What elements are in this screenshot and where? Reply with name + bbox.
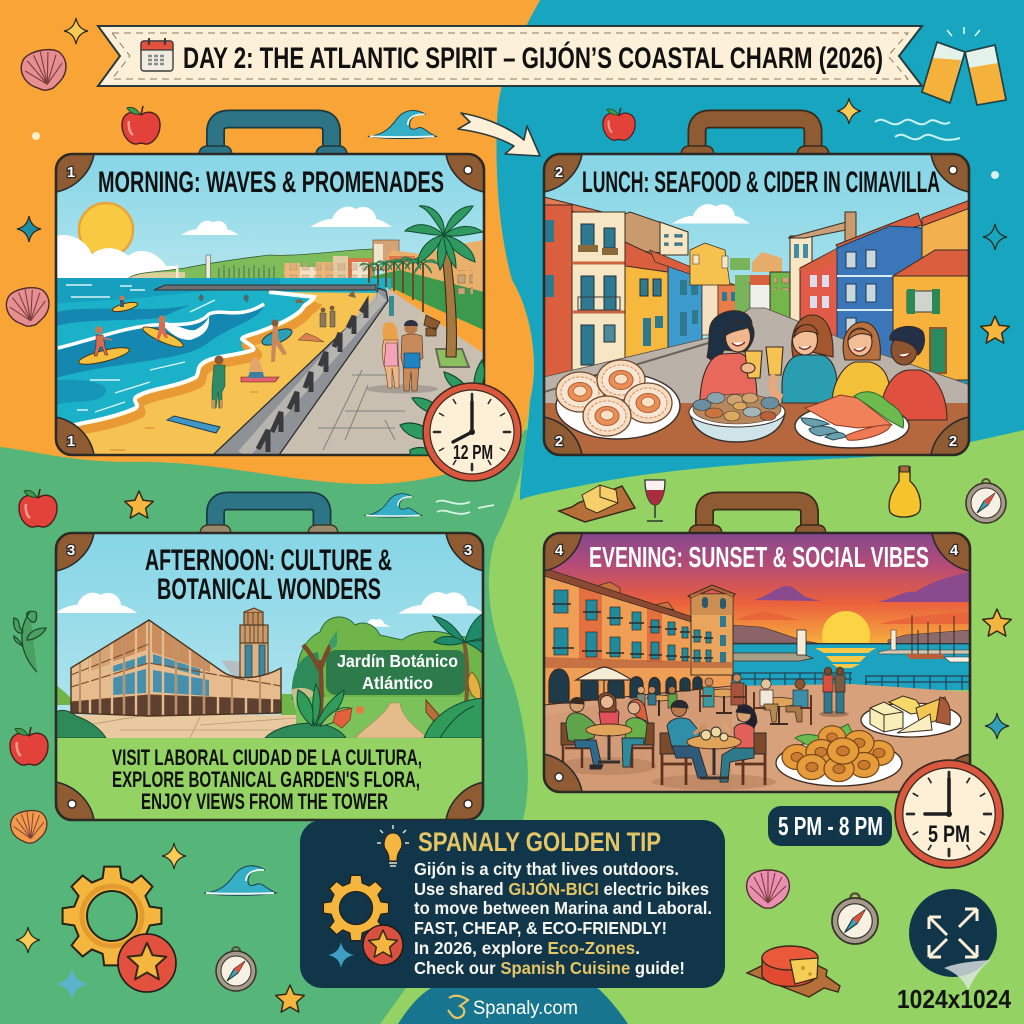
panel: lunch suitcase: 2 — [949, 433, 957, 450]
woman with dark hair — [707, 311, 754, 360]
bench — [424, 315, 440, 336]
panel: afternoon suitcase: 3 — [464, 542, 472, 559]
icon: olive oil bottle — [889, 466, 921, 517]
panel heading — [145, 544, 392, 606]
diners front left table — [557, 693, 657, 775]
plate of fried calamari — [776, 724, 902, 786]
plate of salmon — [795, 392, 909, 448]
woman in yellow — [843, 322, 880, 360]
umbrella — [576, 667, 632, 715]
panel: afternoon suitcase — [55, 501, 484, 820]
suitcase handle — [200, 501, 338, 533]
suitcase handle — [199, 119, 347, 154]
arrow to lunch panel — [458, 113, 540, 156]
decorative icons: lower area — [9, 609, 1011, 1012]
panel description — [112, 745, 422, 814]
distant walker — [389, 296, 394, 316]
cheese plate — [861, 696, 961, 737]
right side buildings — [386, 240, 483, 292]
time pill — [768, 806, 892, 846]
plate of scallops — [556, 360, 680, 439]
icon: large gear with star badge — [63, 867, 176, 992]
woman with brown hair — [792, 315, 833, 357]
promenade railing — [732, 673, 970, 690]
panel: afternoon suitcase: 3 — [67, 542, 75, 559]
panel: morning suitcase: 1 — [67, 164, 75, 181]
panel description: EXPLORE BOTANICAL GARDEN'S FLORA, — [112, 767, 420, 792]
icon: gear with star — [323, 875, 403, 968]
dimensions label: 1024x1024 — [897, 984, 1011, 1014]
clock: 5 PM: 5 PM — [928, 821, 970, 848]
palm tree — [405, 206, 483, 367]
tip body text: Gijón is a city that lives outdoors. — [414, 859, 679, 879]
promenade — [279, 287, 483, 455]
bowl of mussels — [689, 392, 785, 442]
panel: evening suitcase: 4 — [555, 542, 564, 559]
tip body text: Use shared GIJÓN-BICI electric bikes — [414, 878, 709, 899]
icon: cheese board — [559, 485, 635, 522]
suitcase handle — [681, 119, 829, 154]
tip body text — [414, 859, 712, 978]
icon: calendar — [141, 38, 173, 71]
panel: evening suitcase: 4 — [950, 542, 959, 559]
panel: Spanaly golden tip — [300, 820, 725, 988]
clock: 5 PM — [895, 760, 1003, 868]
corners — [544, 533, 582, 571]
corners — [56, 533, 94, 571]
garden label: Atlántico — [362, 673, 433, 693]
panel: morning suitcase: 1 — [67, 433, 75, 450]
icon: expand arrows circle — [909, 889, 997, 990]
panel heading: MORNING: WAVES & PROMENADES — [98, 166, 444, 199]
breakwater — [154, 285, 376, 290]
Laboral building — [71, 610, 281, 716]
clock: 12 PM — [423, 383, 521, 481]
row of palms — [359, 257, 438, 312]
left buildings — [545, 196, 602, 212]
panel: lunch suitcase: 2 — [555, 164, 563, 181]
tip body text: In 2026, explore Eco-Zones. — [414, 938, 640, 958]
tip body text: Check our Spanish Cuisine guide! — [414, 958, 685, 978]
panel: evening suitcase — [544, 501, 970, 792]
cider glasses — [741, 347, 783, 398]
man in red — [880, 370, 947, 420]
suitcase handle — [689, 501, 826, 533]
windows — [554, 590, 711, 662]
right buildings — [770, 272, 790, 318]
title banner — [98, 26, 922, 86]
garden label — [337, 654, 458, 689]
surfers and beachgoers — [77, 290, 356, 433]
waterfront building — [544, 568, 735, 705]
street — [545, 308, 968, 403]
panel: lunch suitcase — [544, 119, 970, 456]
clock: 12 PM: 12 PM — [453, 442, 493, 464]
tip heading: SPANALY GOLDEN TIP — [418, 827, 661, 857]
icon: light bulb — [377, 825, 409, 866]
panel heading: BOTANICAL WONDERS — [157, 573, 381, 606]
decorative icons: top area — [4, 18, 1009, 343]
four friends — [700, 311, 947, 420]
panel heading: AFTERNOON: CULTURE & — [145, 544, 392, 577]
tropical leaves behind clock 1 — [400, 360, 484, 455]
icon: compass — [966, 479, 1006, 523]
panel description: VISIT LABORAL CIUDAD DE LA CULTURA, — [112, 745, 422, 770]
corners — [56, 154, 94, 192]
diners front right table — [652, 700, 776, 790]
far end — [750, 282, 772, 310]
footer brand: Spanaly.com — [473, 997, 578, 1019]
distant diners — [637, 667, 849, 725]
promenade wall — [213, 288, 388, 455]
icon: cheese wheel on board — [747, 946, 840, 997]
panel: morning suitcase — [56, 119, 484, 455]
icon: clinking cider glasses — [922, 27, 1006, 105]
tip body text: to move between Marina and Laboral. — [414, 898, 712, 918]
arcade — [549, 669, 702, 703]
botanical garden — [265, 613, 484, 738]
panel description: ENJOY VIEWS FROM THE TOWER — [141, 789, 388, 814]
icon: wine glass — [645, 480, 665, 521]
tower — [221, 608, 268, 681]
time pill: 5 PM - 8 PM — [778, 811, 883, 841]
tip body text: FAST, CHEAP, & ECO-FRIENDLY! — [414, 918, 667, 938]
table — [544, 403, 970, 456]
sea — [57, 278, 391, 424]
decorative icons: middle row — [19, 489, 494, 527]
walking couple — [366, 320, 438, 394]
panel: lunch suitcase: 2 — [555, 433, 563, 450]
garden label: Jardín Botánico — [337, 651, 458, 671]
corners — [544, 154, 582, 192]
sand — [56, 292, 380, 455]
